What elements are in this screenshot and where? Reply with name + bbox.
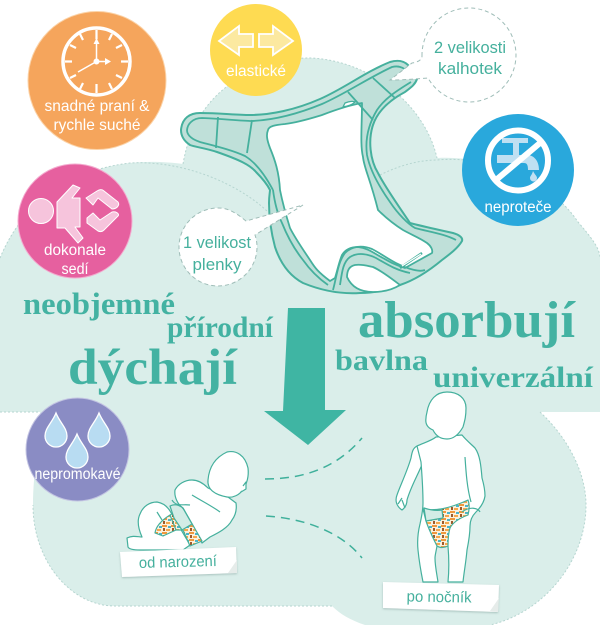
heading words: absorbují <box>358 292 577 349</box>
badge: elastické: elastické <box>226 63 286 80</box>
icon: fit <box>28 185 119 243</box>
toddler body and legs <box>417 435 485 582</box>
callout: 2 velikosti kalhotek <box>390 8 516 102</box>
callout: 2 velikosti kalhotek: kalhotek <box>438 59 502 78</box>
diaper <box>181 61 462 293</box>
heading words: přírodní <box>167 311 274 344</box>
badge: dokonale sedí <box>18 164 132 278</box>
badge: snadné praní: snadné praní & <box>44 98 150 115</box>
dashed connector lower <box>266 516 362 558</box>
badge: nepromokavé <box>26 398 129 501</box>
badge: dokonale sedí: dokonale <box>44 242 106 259</box>
badge: nepromokavé: nepromokavé <box>34 466 120 483</box>
diaper inner seams <box>187 66 456 290</box>
heading words <box>23 286 594 396</box>
badge: snadné praní <box>28 12 166 150</box>
label: od narození: od narození <box>139 553 218 572</box>
label: po nočník <box>383 582 499 612</box>
icon: no tap <box>488 130 548 190</box>
illustration: newborn <box>127 452 248 550</box>
badge: snadné praní: rychle suché <box>54 117 141 134</box>
callout: 2 velikosti kalhotek: 2 velikosti <box>434 38 506 57</box>
newborn torso <box>175 480 236 543</box>
dashed connector upper <box>265 438 362 479</box>
newborn diaper <box>155 508 202 546</box>
illustration: toddler <box>396 392 485 582</box>
label: po nočník: po nočník <box>406 588 472 607</box>
heading words: bavlna <box>335 344 428 377</box>
heading words: univerzální <box>433 361 594 394</box>
icon: drops <box>45 413 110 468</box>
toddler diaper <box>423 500 469 548</box>
heading words: dýchají <box>68 340 238 396</box>
badge: elastické <box>210 4 302 96</box>
diaper white lining <box>267 103 432 281</box>
heading words: neobjemné <box>23 286 175 321</box>
diaper outer shell <box>181 61 462 293</box>
newborn leg <box>127 502 190 550</box>
icon: clock <box>63 28 130 95</box>
callout: 1 velikost plenky: plenky <box>192 256 242 274</box>
newborn head <box>208 452 248 497</box>
toddler head <box>426 392 466 439</box>
badge: dokonale sedí: sedí <box>62 261 89 278</box>
callout: 1 velikost plenky: 1 velikost <box>183 234 251 252</box>
diaper leg opening <box>347 265 400 292</box>
badge: neproteče: neproteče <box>484 199 552 216</box>
callout: 1 velikost plenky <box>179 205 303 286</box>
badge: neproteče <box>462 114 574 226</box>
label: od narození <box>120 547 237 577</box>
arrow <box>264 308 346 445</box>
icon: arrows <box>219 26 293 55</box>
toddler left arm <box>396 446 424 510</box>
